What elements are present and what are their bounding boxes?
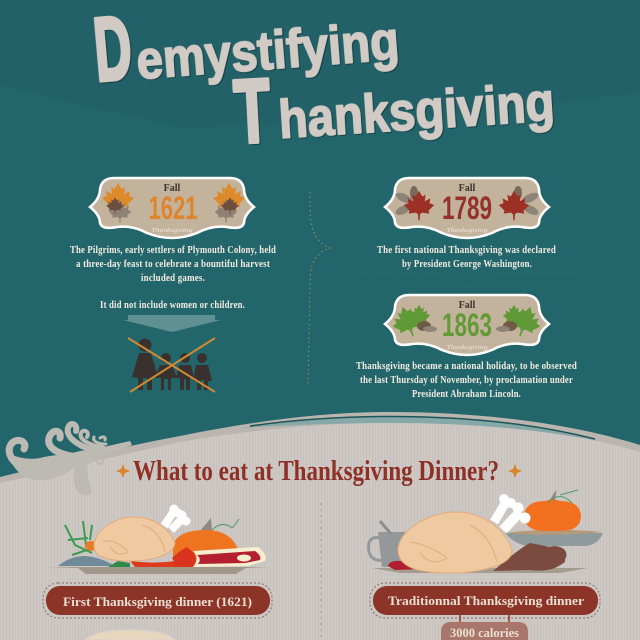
plaque 1863: Fall bbox=[459, 300, 476, 311]
sweet potatoes bbox=[493, 542, 570, 574]
title: emystifying bbox=[134, 11, 401, 91]
timeline dotted connector bbox=[308, 192, 330, 384]
heading: What to eat at Thanksgiving Dinner? bbox=[133, 455, 499, 487]
icon: autumn leaves right bbox=[213, 183, 245, 223]
plaque 1863 bbox=[385, 295, 549, 355]
plaque 1621 bbox=[90, 178, 254, 238]
panel: 1863 bbox=[356, 295, 577, 400]
panel: 1621 bbox=[70, 178, 276, 392]
text: 1789 description bbox=[377, 245, 556, 270]
text: 1863 description: the last Thursday of November, by proclamation under bbox=[360, 375, 573, 386]
fish bbox=[58, 556, 115, 566]
greens bbox=[108, 561, 130, 567]
icon: red leaves right bbox=[499, 186, 540, 220]
text: 1621 description: included games. bbox=[141, 273, 205, 284]
label: first Thanksgiving dinner: First Thanksgiving dinner (1621) bbox=[63, 594, 252, 609]
pie bbox=[505, 530, 603, 546]
plaque 1621: 1621 bbox=[148, 190, 198, 226]
icon: crossed-out women and children bbox=[128, 338, 215, 392]
icon: red leaves left bbox=[394, 186, 434, 220]
label: traditional Thanksgiving dinner bbox=[370, 583, 600, 618]
text: 1863 description bbox=[356, 361, 577, 400]
calories badge bbox=[441, 615, 528, 640]
plaque 1789: 1789 bbox=[442, 190, 492, 226]
panel: lower cream section bbox=[0, 412, 640, 640]
text: 1621 description bbox=[70, 245, 276, 311]
plaque 1789: Fall bbox=[459, 183, 476, 194]
meat bbox=[193, 547, 266, 567]
turkey bbox=[398, 494, 530, 573]
panel: 1789 bbox=[377, 178, 556, 270]
cranberries bbox=[388, 561, 422, 570]
plaque 1789: Thanksgiving bbox=[446, 227, 488, 234]
ornament: scroll flourish bbox=[8, 424, 132, 496]
text: 1621 description: It did not include women or children. bbox=[100, 300, 245, 311]
pumpkin bbox=[524, 490, 581, 531]
plate bbox=[48, 567, 268, 574]
text: 1621 description: a three-day feast to celebrate a bountiful harvest bbox=[76, 259, 270, 270]
text: 1863 description: Thanksgiving became a national holiday, to be observed bbox=[356, 361, 577, 372]
illustration: traditional Thanksgiving dinner bbox=[368, 490, 603, 574]
herbs bbox=[65, 521, 92, 555]
connector: 1789 to 1863 bbox=[355, 273, 578, 288]
label: first Thanksgiving dinner bbox=[43, 583, 272, 618]
plaque 1863: Thanksgiving bbox=[446, 344, 488, 351]
illustration: first Thanksgiving dinner bbox=[48, 504, 268, 574]
plaque 1621: Thanksgiving bbox=[152, 227, 193, 234]
icon: autumn leaves left bbox=[102, 183, 134, 223]
icon: green leaves left bbox=[387, 301, 437, 342]
text: 1863 description: President Abraham Lincoln. bbox=[412, 389, 521, 400]
label: traditional Thanksgiving dinner: Traditionnal Thanksgiving dinner bbox=[388, 593, 584, 608]
plaque 1789 bbox=[385, 178, 549, 238]
plate shadow bbox=[372, 568, 588, 573]
turkey bbox=[94, 504, 190, 561]
illustration: bottom plate bbox=[85, 630, 175, 640]
arrow: down bbox=[123, 315, 221, 332]
divider bbox=[320, 503, 322, 640]
icon: green leaves right bbox=[496, 301, 546, 342]
title bbox=[90, 0, 556, 163]
tomatoes bbox=[130, 556, 197, 567]
pumpkin bbox=[173, 518, 240, 558]
plaque 1863: 1863 bbox=[442, 307, 492, 343]
title: T bbox=[232, 61, 273, 163]
text: 1789 description: by President George Washington. bbox=[402, 259, 532, 270]
mug bbox=[368, 521, 407, 567]
plaque 1621: Fall bbox=[164, 183, 181, 194]
text: 1789 description: The first national Thanksgiving was declared bbox=[377, 245, 556, 256]
carrot bbox=[85, 541, 97, 551]
icon: star left bbox=[116, 464, 130, 478]
calories badge: 3000 calories bbox=[450, 626, 519, 640]
icon: star right bbox=[508, 464, 522, 478]
text: 1621 description: The Pilgrims, early settlers of Plymouth Colony, held bbox=[70, 245, 276, 256]
title: hanksgiving bbox=[277, 72, 556, 150]
